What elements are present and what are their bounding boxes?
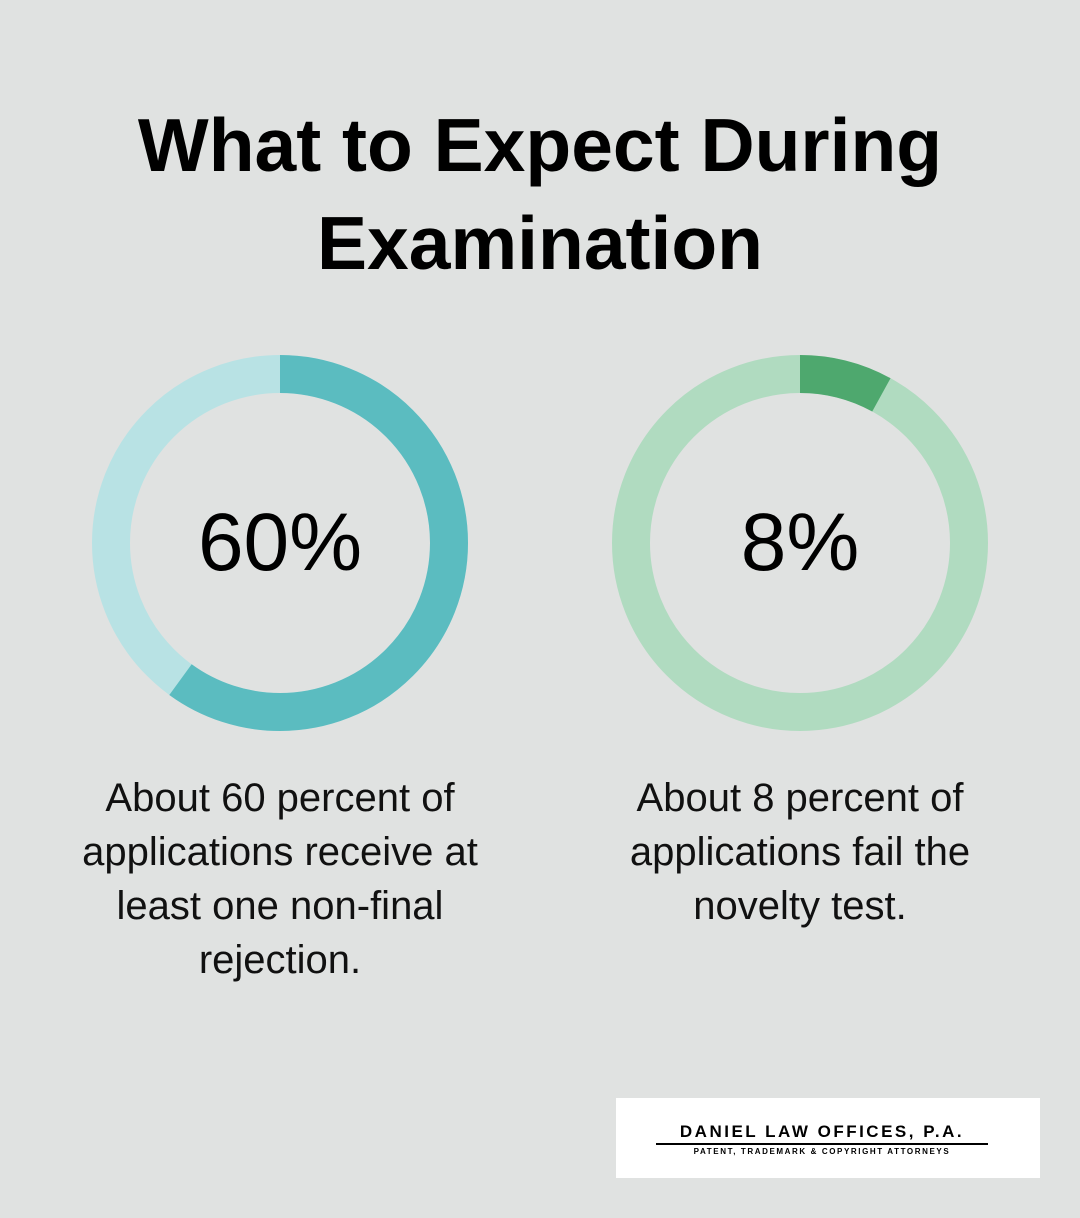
logo bbox=[616, 1098, 1040, 1178]
donut: 60% bbox=[92, 355, 468, 731]
donut: 60%: 60% bbox=[198, 497, 362, 588]
text: 8% description: About 8 percent of applications fail the novelty test. bbox=[630, 776, 970, 928]
donut: 8%: 8% bbox=[741, 497, 859, 588]
logo: DANIEL LAW OFFICES, P.A. bbox=[680, 1122, 964, 1141]
title: What to Expect During bbox=[138, 103, 942, 187]
logo: PATENT, TRADEMARK & COPYRIGHT ATTORNEYS bbox=[694, 1147, 950, 1156]
title bbox=[138, 103, 942, 285]
title: Examination bbox=[317, 201, 763, 285]
text: 60% description: About 60 percent of applications receive at least one non-final rejection. bbox=[82, 776, 478, 982]
donut: 8% bbox=[612, 355, 988, 731]
